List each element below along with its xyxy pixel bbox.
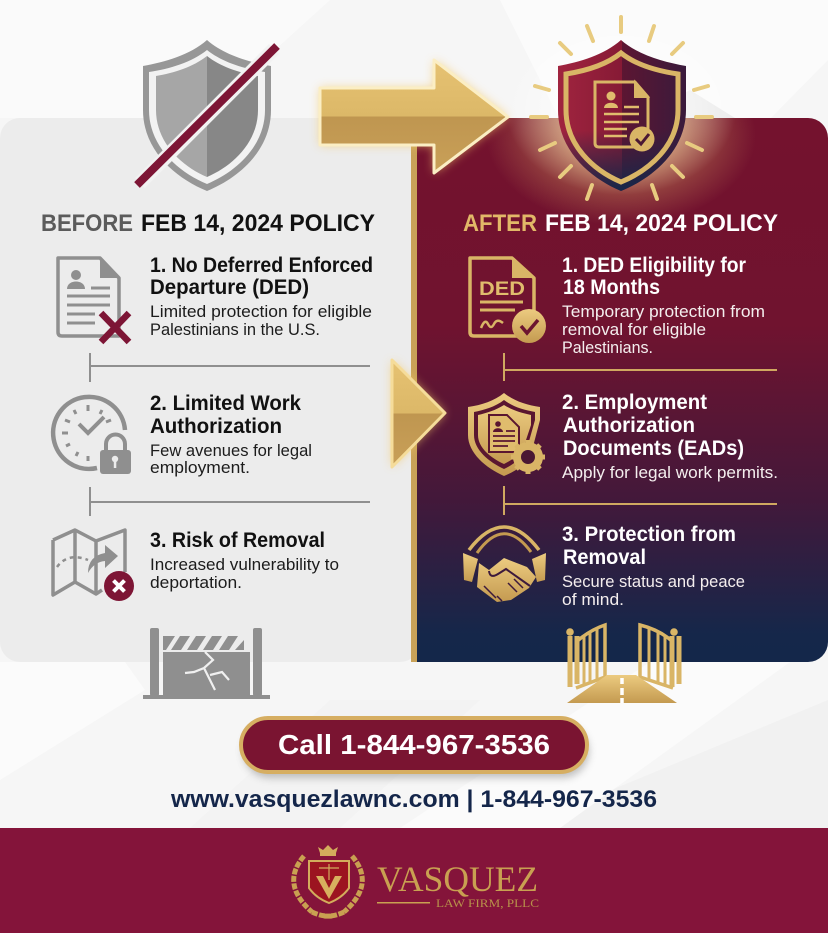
logo: Vasquez Law Firm [294,845,539,916]
icon: DED document: DED [479,279,525,300]
icon: broken barrier [143,628,270,699]
text: employment authorization documents: Authorization [563,414,695,437]
text: no deferred enforced departure [150,254,373,339]
text: DED eligibility: 1. DED Eligibility for [562,254,746,277]
icon: map with arrow and X [53,530,134,601]
text: DED eligibility: Temporary protection from [562,303,765,321]
text: no deferred enforced departure: 1. No Deferred Enforced [150,254,373,277]
text: DED eligibility: removal for eligible [562,321,706,339]
center gold divider [411,145,417,662]
text: DED eligibility [562,254,765,357]
icon: shield with gear [468,393,545,476]
text: protection from removal: Secure status and peace [562,573,745,591]
text: risk of removal: deportation. [150,574,242,592]
text: no deferred enforced departure: Limited protection for eligible [150,303,372,321]
logo crest [294,845,362,916]
heading: after policy: FEB 14, 2024 POLICY [545,210,778,237]
logo wordmark: VASQUEZ [377,859,538,899]
button: call [241,718,589,778]
icon: handshake under arc [463,527,546,602]
text: no deferred enforced departure: Departure (DED) [150,276,309,299]
connector: left first [90,353,370,382]
button: call: Call 1-844-967-3536 [278,729,550,760]
connector: left second [90,487,370,516]
panel: after policy [417,118,828,662]
icon: glowing arrow [320,60,508,173]
logo subtitle: LAW FIRM, PLLC [436,896,539,910]
text: risk of removal: Increased vulnerability to [150,556,339,574]
icon: glowing gold shield with document [486,17,756,225]
text: protection from removal: of mind. [562,591,624,609]
panel: before policy [0,118,420,662]
icon: document with X [58,258,129,342]
text: risk of removal: 3. Risk of Removal [150,529,325,552]
text: DED eligibility: 18 Months [563,276,660,299]
connector: right first [504,353,777,381]
text: employment authorization documents: Apply for legal work permits. [562,464,778,482]
icon: open gates and road [566,625,679,703]
text: website and phone: www.vasquezlawnc.com | 1-844-967-3536 [170,786,657,813]
text: risk of removal [150,529,339,592]
text: protection from removal: 3. Protection from [562,523,736,546]
heading: after policy: AFTER [463,210,537,237]
connector: right second [504,486,777,515]
text: DED eligibility: Palestinians. [562,339,653,357]
text: no deferred enforced departure: Palestinians in the U.S. [150,321,320,339]
heading: before policy: FEB 14, 2024 POLICY [141,210,375,237]
text: employment authorization documents: 2. Employment [562,391,707,414]
icon: small center arrow [392,360,445,467]
text: limited work authorization: Authorization [150,415,282,438]
heading: before policy: BEFORE [41,210,133,237]
icon: clock with lock [53,397,131,474]
text: limited work authorization: Few avenues for legal [150,442,312,460]
heading: before policy [41,210,375,237]
text: employment authorization documents [562,391,778,482]
footer band [0,828,828,933]
text: protection from removal [562,523,745,609]
text: employment authorization documents: Documents (EADs) [563,437,744,460]
text: limited work authorization [150,392,312,477]
icon: DED document [470,258,546,343]
text: limited work authorization: 2. Limited Work [150,392,301,415]
text: protection from removal: Removal [563,546,646,569]
icon: crossed-out gray shield [137,40,277,191]
text: limited work authorization: employment. [150,459,250,477]
